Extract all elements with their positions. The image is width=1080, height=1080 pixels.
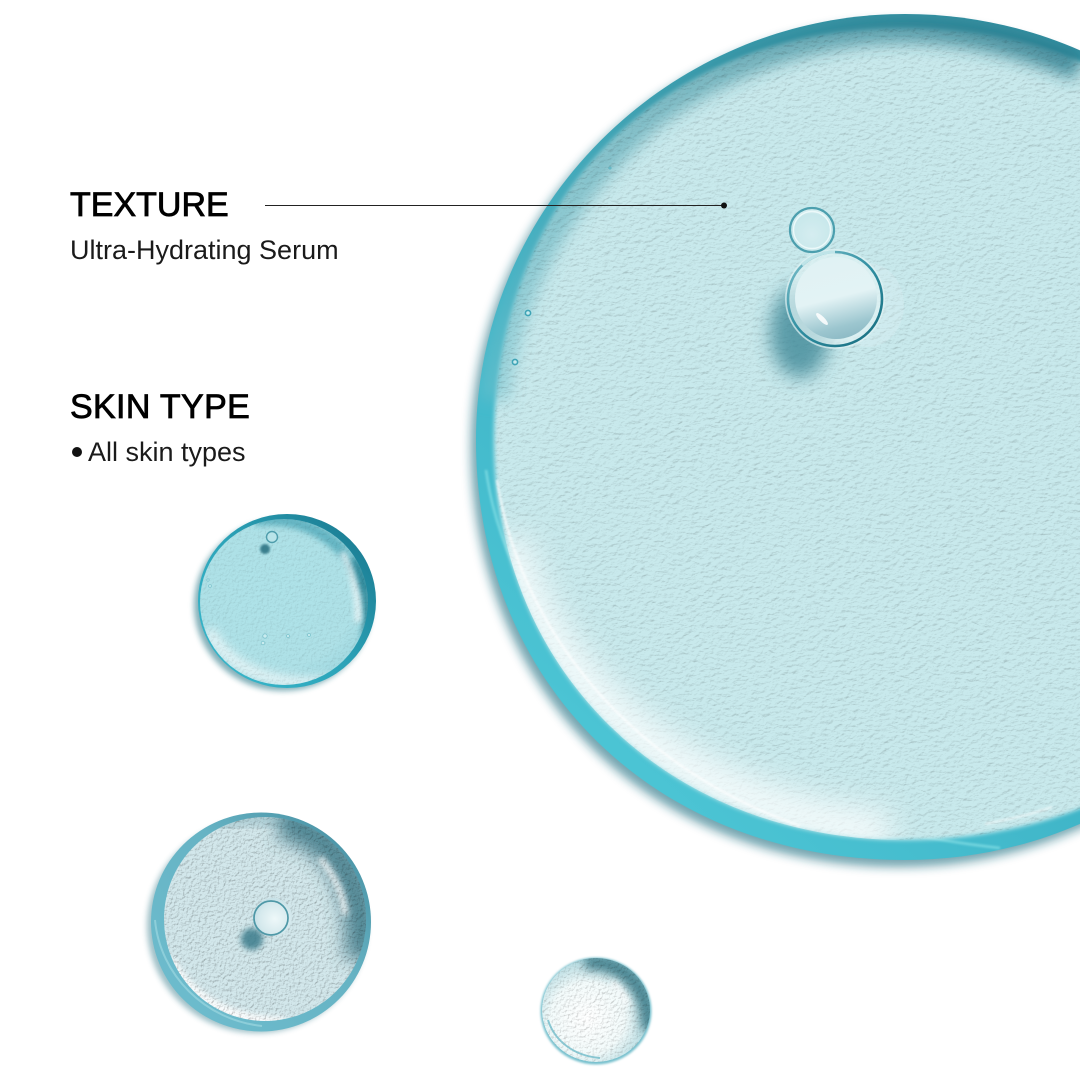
inner edge highlights xyxy=(497,480,1052,826)
heading: skin type: SKIN TYPE xyxy=(70,388,250,426)
bullet: all skin types: All skin types xyxy=(88,437,246,467)
large bubble xyxy=(785,249,904,349)
small bubble xyxy=(789,207,835,253)
bubble in medium drop xyxy=(207,532,310,645)
wide serum drop, lower left xyxy=(147,812,372,1033)
tiny air bubbles xyxy=(512,167,611,365)
bubble in wide drop xyxy=(241,898,292,950)
small serum drop, bottom centre xyxy=(540,957,653,1065)
text: ultra-hydrating serum: Ultra-Hydrating Serum xyxy=(70,235,339,265)
leader line from texture heading to large drop xyxy=(265,202,727,208)
medium serum drop, upper left xyxy=(194,514,378,691)
white glow along lower-left inner edge xyxy=(505,540,890,834)
heading: texture: TEXTURE xyxy=(70,186,229,224)
serum bubble shadow xyxy=(770,286,830,378)
large serum drop xyxy=(470,10,1080,870)
